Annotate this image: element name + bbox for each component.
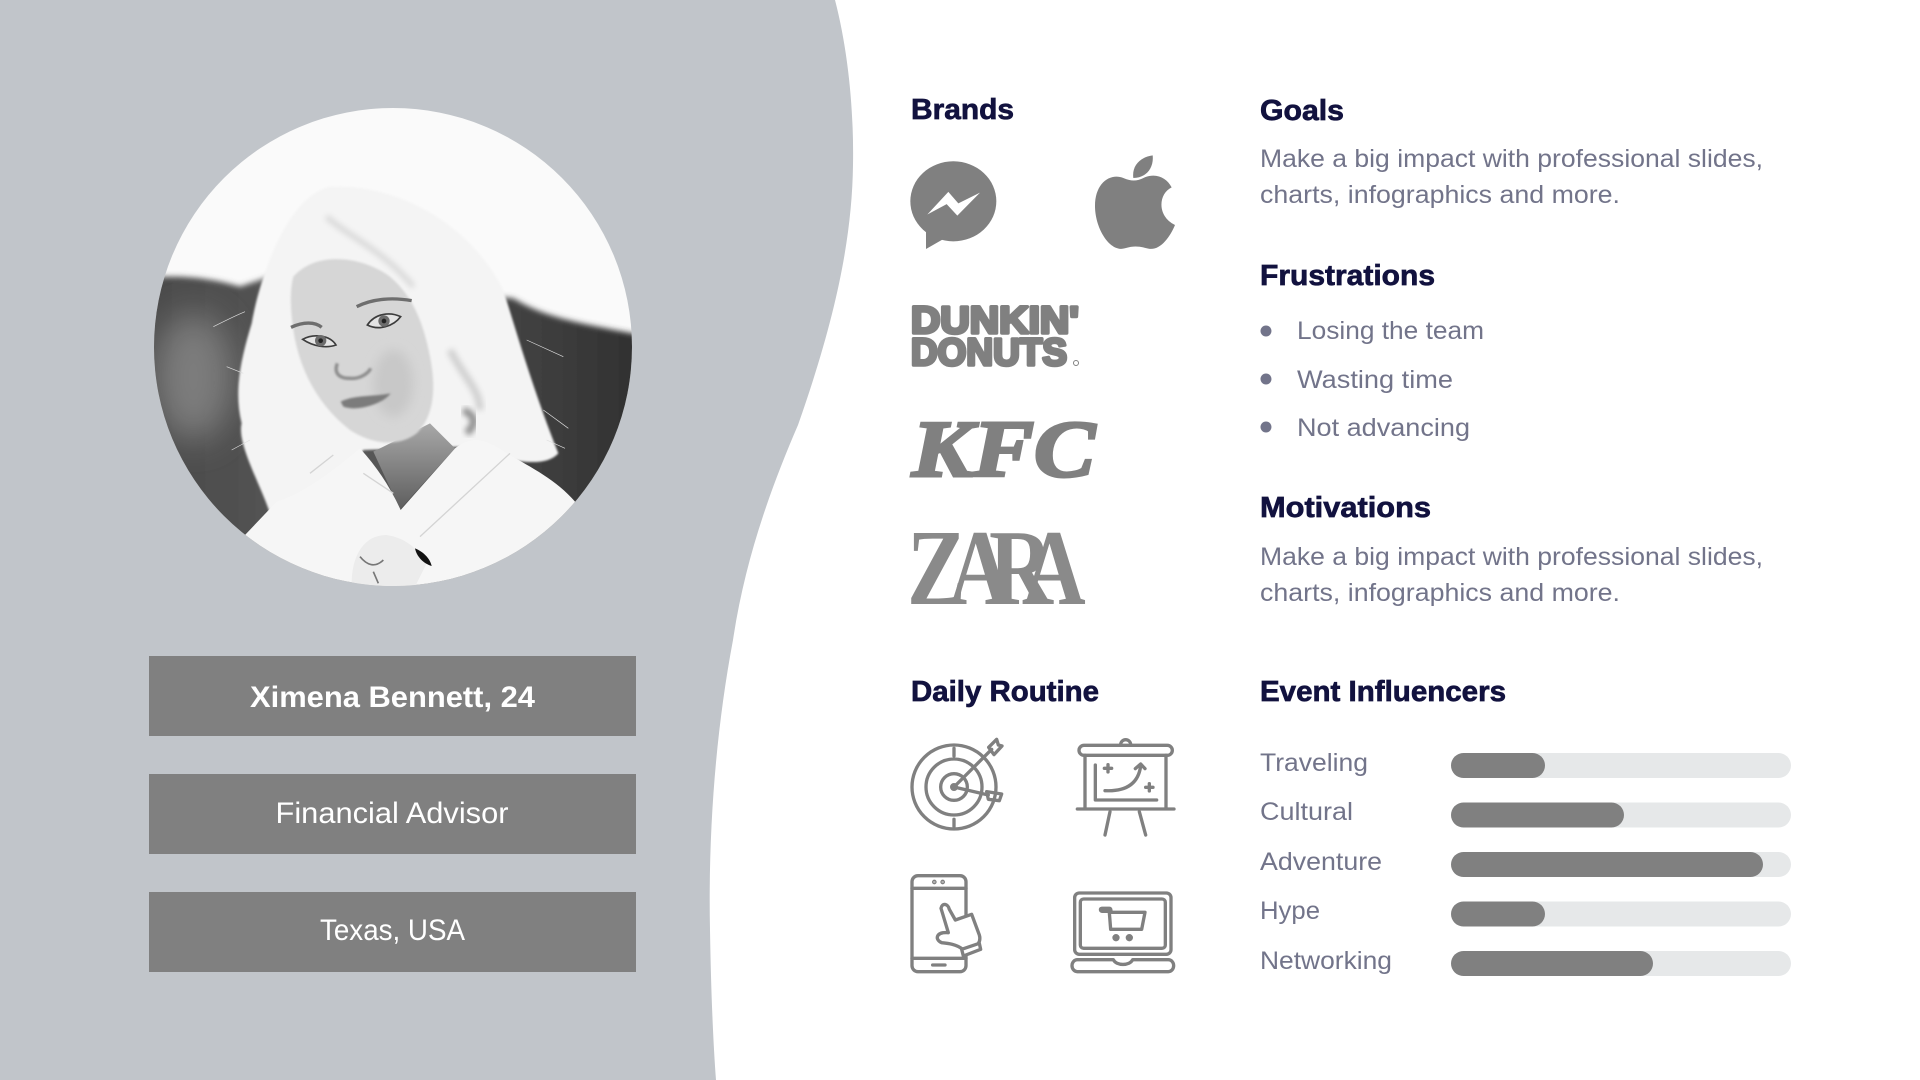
name box [149, 656, 636, 736]
list: frustrations: Losing the team [1297, 317, 1484, 345]
heading: Frustrations: Frustrations [1260, 260, 1435, 292]
bar chart: event influencers [1260, 749, 1791, 976]
icon: laptop with shopping cart [1072, 893, 1174, 972]
row: Hype: Hype [1260, 897, 1320, 925]
icon: messenger logo [910, 161, 996, 249]
location box [149, 892, 636, 972]
logo: Dunkin' Donuts [911, 300, 1079, 374]
text block: motivations description: charts, infographics and more. [1260, 579, 1620, 607]
icon: target with arrows [912, 739, 1002, 829]
row: Traveling: Traveling [1260, 749, 1368, 777]
text block: goals description [1260, 145, 1763, 209]
icon: apple logo [1095, 155, 1175, 249]
job title box: Financial Advisor [276, 797, 509, 830]
text block: goals description: charts, infographics and more. [1260, 181, 1620, 209]
heading: Goals: Goals [1260, 95, 1344, 127]
logo: ZARA: ZARA [907, 509, 1086, 628]
text block: goals description: Make a big impact with professional slides, [1260, 145, 1763, 173]
row: Adventure: Adventure [1260, 848, 1382, 876]
location box: Texas, USA [320, 914, 465, 947]
text block: motivations description: Make a big impact with professional slides, [1260, 543, 1763, 571]
row: Traveling [1260, 749, 1791, 778]
panel: left grey wave background [0, 0, 853, 1080]
row: Adventure [1260, 848, 1791, 877]
job title box [149, 774, 636, 854]
row: Networking [1260, 947, 1791, 976]
logo: KFC: KFC [911, 404, 1096, 494]
heading: Brands: Brands [911, 94, 1014, 126]
heading: Event Influencers: Event Influencers [1260, 676, 1506, 708]
row: Cultural [1260, 798, 1791, 828]
list: frustrations: Not advancing [1297, 414, 1470, 442]
icon: presentation board with chart [1077, 740, 1174, 835]
logo: Dunkin' Donuts: DUNKIN' [911, 300, 1079, 342]
list: frustrations: Wasting time [1297, 366, 1453, 394]
list: frustrations [1260, 317, 1484, 442]
text block: motivations description [1260, 543, 1763, 607]
portrait photo [154, 108, 632, 586]
row: Hype [1260, 897, 1791, 926]
logo: Dunkin' Donuts: DONUTS [911, 332, 1067, 374]
name box: Ximena Bennett, 24 [250, 681, 535, 714]
heading: Daily Routine: Daily Routine [911, 676, 1099, 708]
icon: phone with pointing hand [912, 876, 981, 972]
heading: Motivations: Motivations [1260, 492, 1431, 524]
row: Networking: Networking [1260, 947, 1392, 975]
row: Cultural: Cultural [1260, 798, 1353, 826]
